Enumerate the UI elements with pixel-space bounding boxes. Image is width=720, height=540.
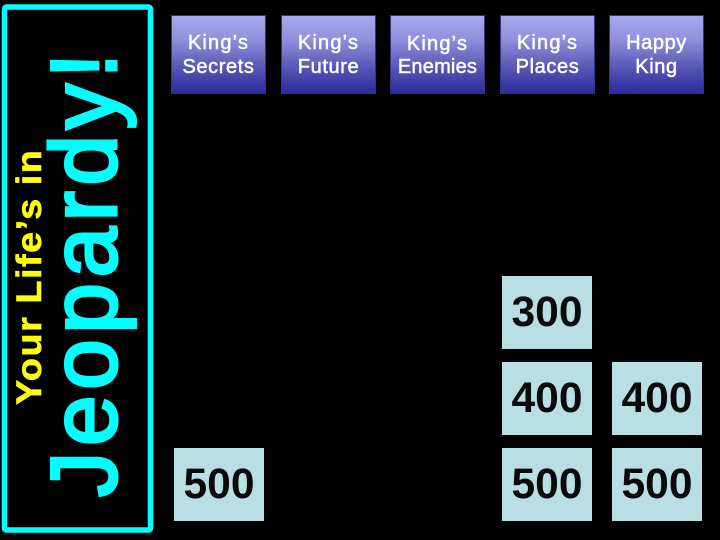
- title: Jeopardy!: Jeopardy!: [31, 53, 136, 497]
- title panel: rotated Jeopardy frame: [2, 4, 154, 533]
- category header: King's Future: [281, 15, 376, 94]
- tile: Happy King 500: [612, 448, 702, 521]
- tile: King's Secrets 500: 500: [183, 460, 255, 508]
- tile: Happy King 500: 500: [621, 460, 693, 508]
- tile: King's Places 400: [502, 362, 592, 435]
- category header: King's Future: Future: [298, 56, 359, 78]
- category header: Happy King: [609, 15, 704, 94]
- frame border: [4, 7, 150, 530]
- tile: King's Secrets 500: [174, 448, 264, 521]
- category header: King's Secrets: [171, 15, 266, 94]
- category header: King's Places: Places: [516, 56, 579, 78]
- category header: King's Secrets: King’s: [188, 32, 249, 54]
- tile: King's Places 400: 400: [511, 374, 583, 422]
- category header: Happy King: King: [635, 56, 678, 78]
- category header: Happy King: Happy: [626, 32, 687, 54]
- tile: King's Places 500: [502, 448, 592, 521]
- tile: King's Places 500: 500: [511, 460, 583, 508]
- tile: Happy King 400: [612, 362, 702, 435]
- tile: King's Places 300: 300: [511, 288, 583, 336]
- tile: King's Places 300: [502, 276, 592, 349]
- subtitle: Your Life's in: Your Life’s in: [9, 150, 49, 405]
- category header: King's Enemies: King’s: [407, 33, 468, 55]
- category header: King's Places: King’s: [517, 32, 578, 54]
- tile: Happy King 400: 400: [621, 374, 693, 422]
- category header: King's Secrets: Secrets: [182, 56, 254, 78]
- category header: King's Enemies: [390, 15, 485, 94]
- category header: King's Future: King’s: [298, 32, 359, 54]
- category header: King's Places: [500, 15, 595, 94]
- category header: King's Enemies: Enemies: [398, 56, 477, 78]
